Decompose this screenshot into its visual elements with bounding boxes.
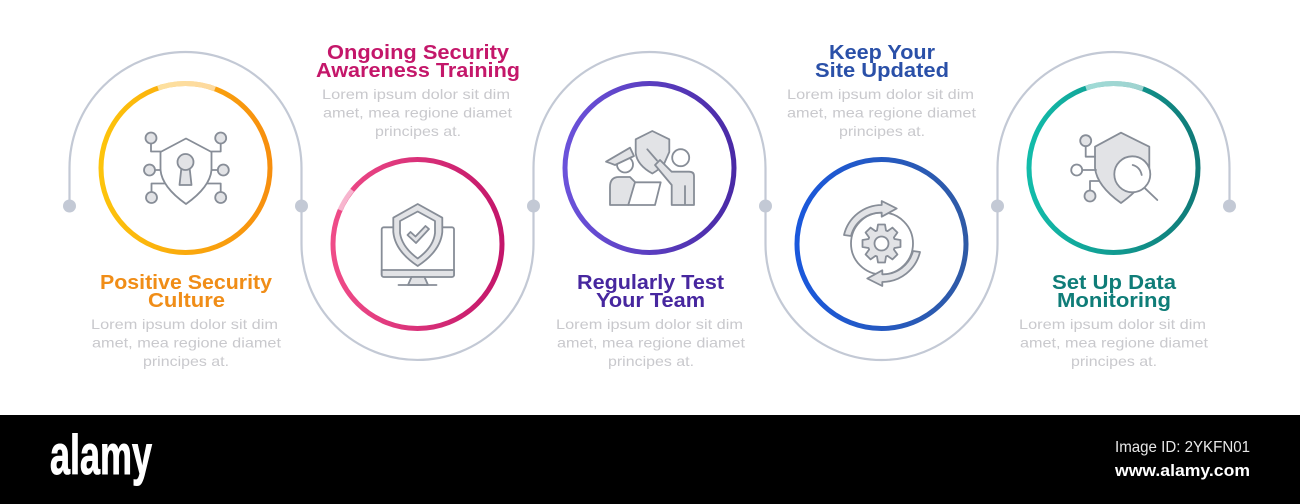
body text 2: amet, mea regione diamet: [323, 104, 512, 120]
heading 3: Regularly Test: [577, 272, 724, 294]
heading 1: [100, 272, 273, 312]
heading 5: Monitoring: [1057, 290, 1171, 312]
heading 4: Site Updated: [815, 60, 949, 82]
body text 3: principes at.: [608, 353, 694, 369]
ring 2: [333, 160, 502, 328]
panel: regularly test your team: [556, 84, 745, 369]
body text 5: Lorem ipsum dolor sit dim: [1019, 316, 1206, 332]
heading 2: Awareness Training: [316, 60, 520, 82]
ring 5: [1029, 84, 1198, 252]
body text 2: [322, 86, 512, 139]
ring 4: [797, 160, 966, 328]
icon: gear with rotating arrows: [844, 201, 920, 286]
heading 5: [1052, 272, 1177, 312]
body text 1: amet, mea regione diamet: [92, 334, 281, 350]
body text 5: [1019, 316, 1208, 369]
heading 3: Your Team: [596, 290, 705, 312]
ring 3: [565, 84, 734, 252]
panel: keep your site updated: [787, 42, 976, 328]
body text 2: Lorem ipsum dolor sit dim: [322, 86, 510, 102]
icon: shield on monitor: [382, 204, 454, 285]
body text 4: [787, 86, 976, 139]
body text 5: principes at.: [1071, 353, 1157, 369]
ring 1: [101, 84, 270, 252]
panel: set up data monitoring: [1019, 83, 1208, 369]
icon: shield, student and instructor: [606, 131, 694, 205]
heading 3: [577, 272, 724, 312]
heading 1: Positive Security: [100, 272, 273, 294]
body text 1: [91, 316, 281, 369]
footer band: [0, 415, 1300, 504]
icon: shield with magnifier and nodes: [1071, 133, 1157, 203]
body text 3: [556, 316, 745, 369]
heading 2: [316, 42, 520, 82]
body text 3: Lorem ipsum dolor sit dim: [556, 316, 743, 332]
body text 4: amet, mea regione diamet: [787, 104, 976, 120]
heading 4: [815, 42, 949, 82]
body text 1: Lorem ipsum dolor sit dim: [91, 316, 278, 332]
body text 3: amet, mea regione diamet: [557, 334, 745, 350]
heading 1: Culture: [148, 290, 225, 312]
body text 4: Lorem ipsum dolor sit dim: [787, 86, 974, 102]
body text 1: principes at.: [143, 353, 229, 369]
body text 4: principes at.: [839, 123, 925, 139]
website: www.alamy.com: [1114, 461, 1250, 480]
heading 2: Ongoing Security: [327, 42, 510, 64]
heading 4: Keep Your: [829, 42, 935, 64]
panel: positive security culture: [91, 83, 281, 369]
serpentine connector line: [63, 52, 1236, 360]
alamy logo: alamy: [50, 423, 152, 486]
body text 2: principes at.: [375, 123, 461, 139]
icon: shield with keyhole and network nodes: [144, 132, 229, 204]
panel: ongoing security awareness training: [316, 42, 520, 328]
heading 5: Set Up Data: [1052, 272, 1177, 294]
image id: Image ID: 2YKFN01: [1115, 439, 1250, 456]
body text 5: amet, mea regione diamet: [1020, 334, 1208, 350]
